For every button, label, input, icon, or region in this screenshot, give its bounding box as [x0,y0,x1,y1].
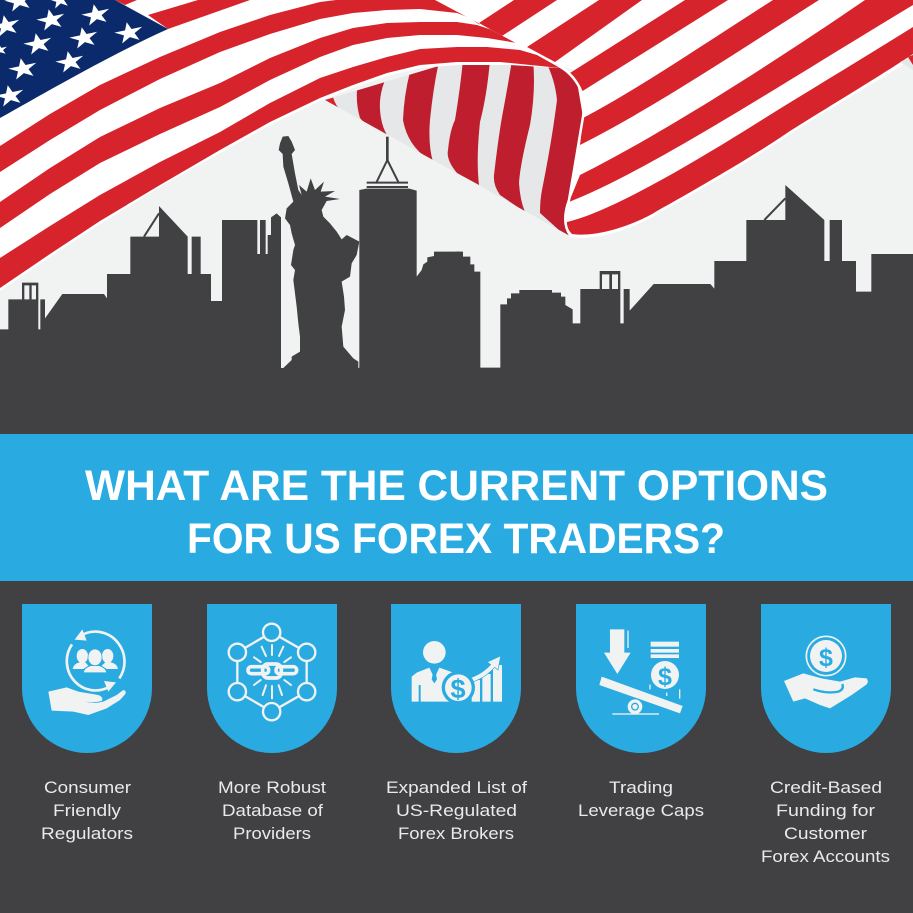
badge 4 [576,604,706,753]
icon: hand holding people [48,629,126,715]
skyline left [0,189,460,430]
caption 5 [761,778,890,866]
caption 3 [386,778,527,843]
caption 5: Forex Accounts [761,847,890,866]
card 1: consumer friendly regulators [22,604,152,843]
badge 1 [22,604,152,753]
icon: businessman with coin and growth chart [412,641,502,704]
card 5: credit-based funding [761,604,891,866]
title: FOR US FOREX TRADERS? [187,515,725,563]
flag: blue canton with stars [0,0,168,118]
tower antenna [367,137,408,187]
caption 5: Funding for [776,801,875,820]
caption 2: Database of [222,801,323,820]
caption 1: Regulators [41,824,133,843]
american flag [0,0,913,291]
lower panel [0,581,913,913]
flag: folded-under back side [323,60,590,240]
caption 1: Consumer [44,778,131,797]
icon: dollar sign on coin: $ [450,674,466,704]
caption 2: Providers [233,824,311,843]
caption 2 [218,778,326,843]
badge 3 [391,604,521,753]
caption 1: Friendly [53,801,122,820]
caption 5: Credit-Based [770,778,882,797]
title band [0,434,913,581]
caption 2: More Robust [218,778,326,797]
title [85,462,828,563]
skyline base [0,368,913,434]
card 4: trading leverage caps [576,604,706,820]
icon: dollar sign on coin: $ [658,663,672,691]
icon: hand holding coin [784,636,868,708]
badge 5 [761,604,891,753]
caption 3: US-Regulated [396,801,517,820]
caption 5: Customer [784,824,867,843]
flag: main waving surface [0,0,560,291]
statue of liberty silhouette [279,136,359,369]
icon: seesaw with arrow and coin [599,629,683,715]
icon: network hexagon with chain [229,624,315,720]
statue of liberty gap [281,200,359,368]
caption 4: Trading [609,778,673,797]
icon: dollar sign on coin: $ [819,644,833,672]
caption 4: Leverage Caps [578,801,704,820]
caption 4 [578,778,704,820]
flag: right stripes [430,0,913,238]
caption 1 [41,778,133,843]
sky background [0,0,913,434]
card 2: more robust database [207,604,337,843]
caption 3: Expanded List of [386,778,527,797]
skyline right [455,185,913,437]
flag: fold edge highlight [559,66,584,235]
badge 2 [207,604,337,753]
caption 3: Forex Brokers [398,824,514,843]
title: WHAT ARE THE CURRENT OPTIONS [85,462,828,510]
card 3: expanded list of brokers [386,604,527,843]
